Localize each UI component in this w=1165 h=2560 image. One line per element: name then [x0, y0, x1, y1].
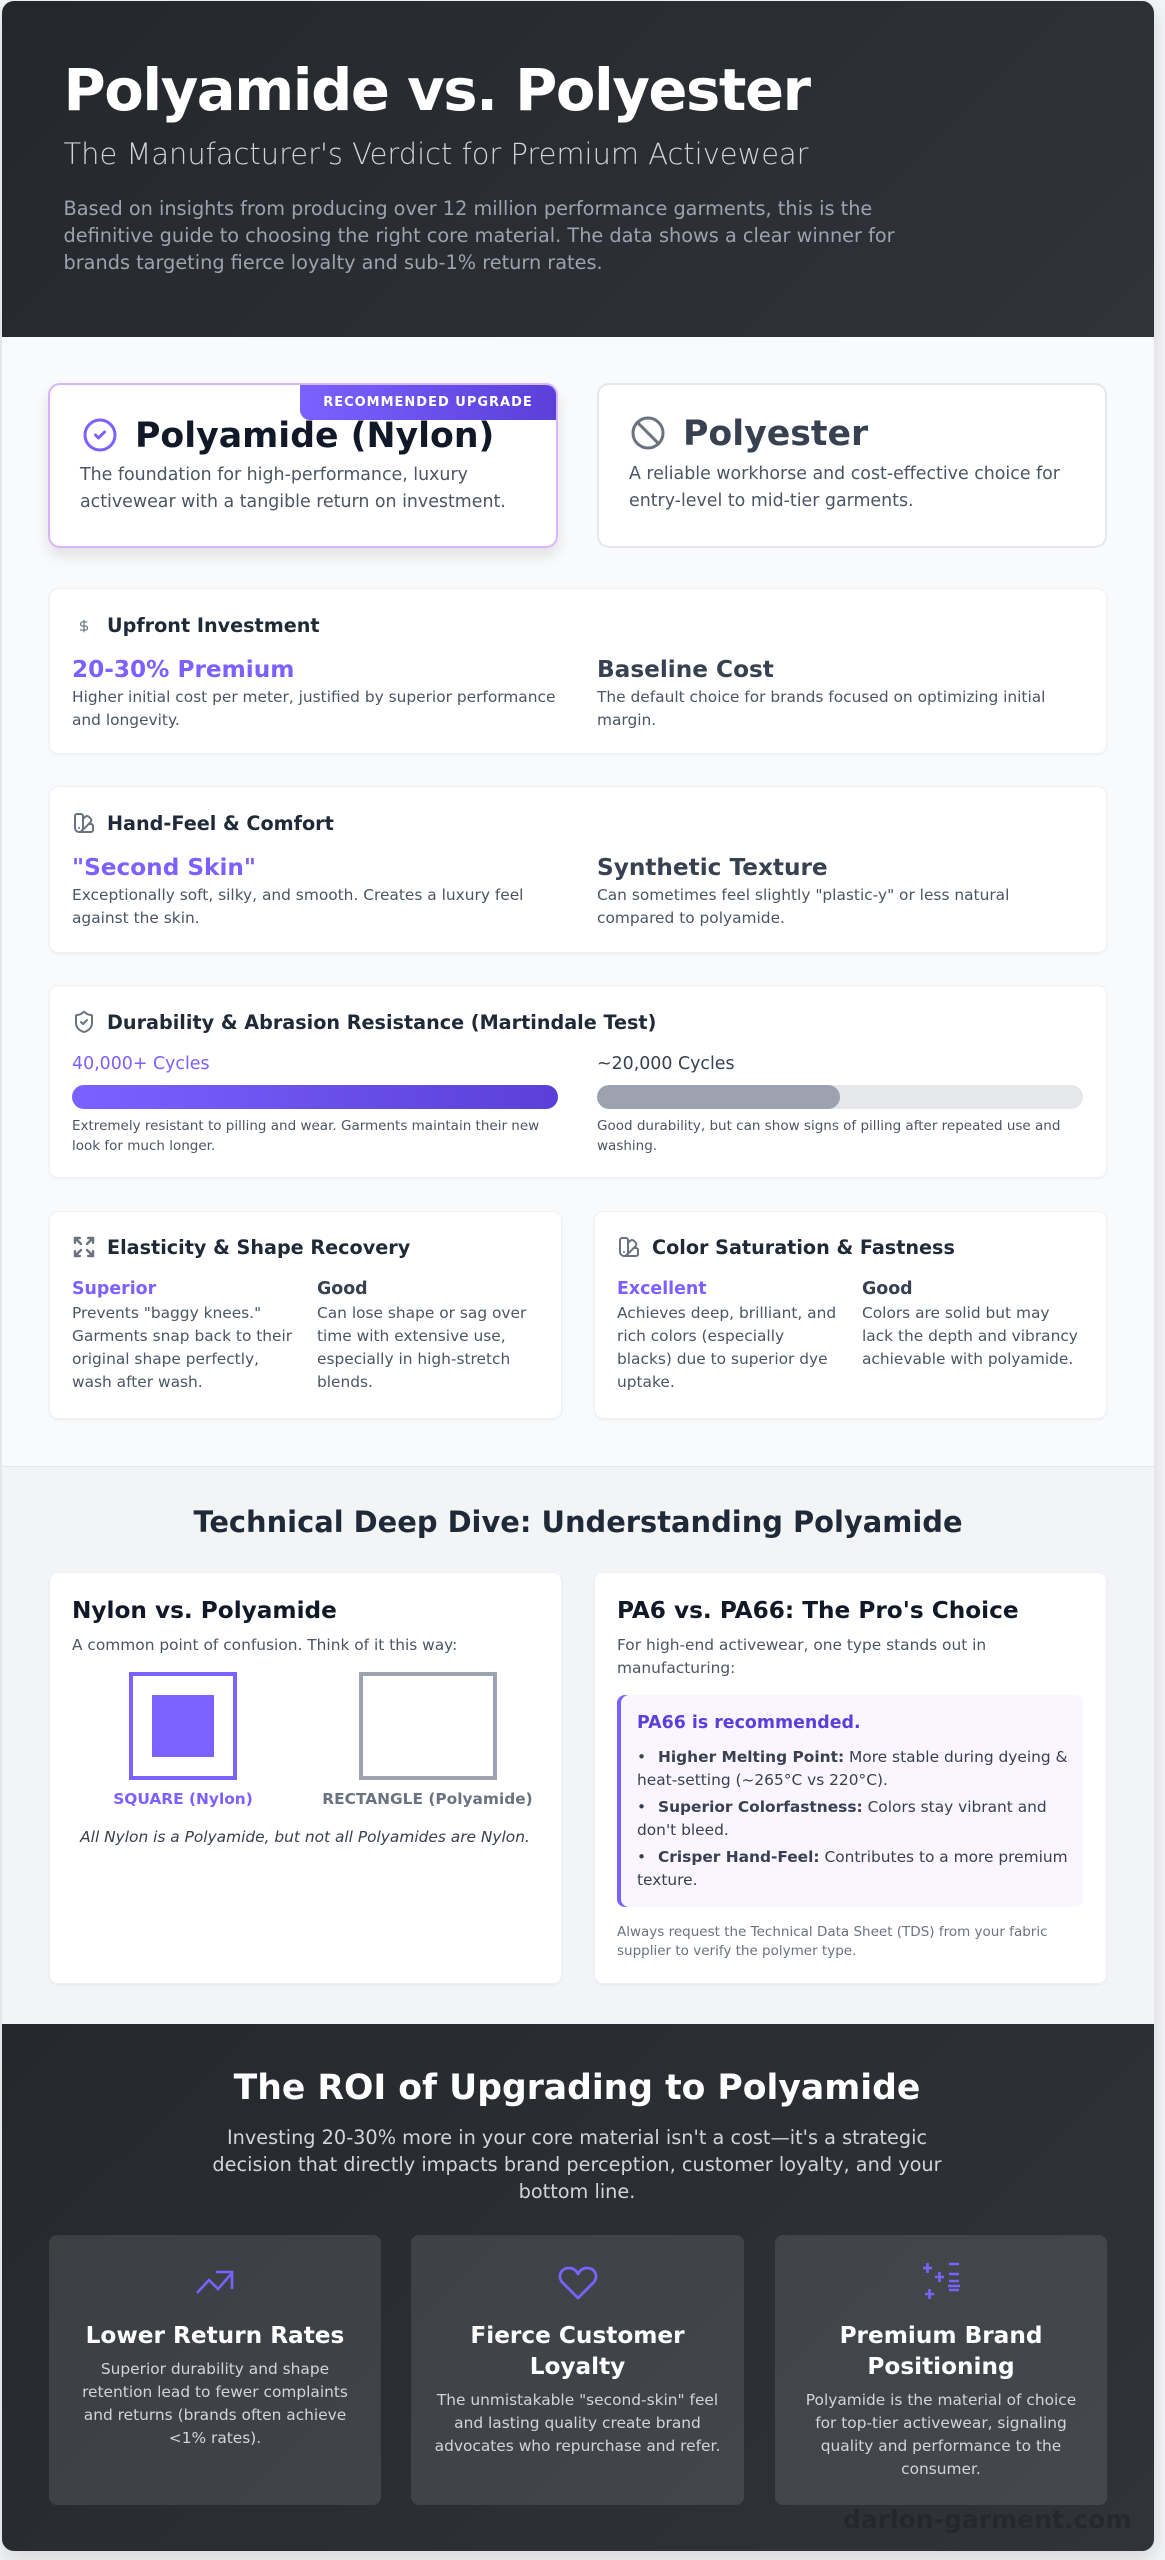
description: activewear with a tangible return on investment. — [80, 492, 506, 512]
text — [82, 2360, 348, 2447]
text: polyester: blends. — [317, 1373, 373, 1391]
icon: swatch — [74, 813, 94, 833]
callout: PA66 recommended — [617, 1695, 1083, 1907]
text: polyamide: original shape perfectly, — [72, 1350, 259, 1368]
text: The unmistakable "second-skin" feel — [437, 2391, 718, 2409]
label: rectangle: RECTANGLE (Polyamide) — [322, 1790, 533, 1808]
icon: expand arrows — [74, 1236, 94, 1258]
icon: sparkles — [923, 2262, 960, 2299]
label: polyamide: Excellent — [617, 1279, 707, 1299]
section heading: Technical Deep Dive: Understanding Polyamide — [193, 1505, 963, 1539]
text: polyester: compared to polyamide. — [597, 909, 785, 927]
value: polyamide: "Second Skin" — [72, 854, 256, 881]
watermark: darlon-garment.com — [843, 2505, 1131, 2534]
text: polyamide: wash after wash. — [72, 1373, 203, 1391]
list item: • — [637, 1848, 646, 1866]
list item: Superior Colorfastness: Colors stay vibrant and — [658, 1798, 1047, 1816]
description: The foundation for high-performance, luxury — [80, 464, 468, 484]
intro text: definitive guide to choosing the right core material. The data shows a clear winner for — [64, 224, 895, 246]
subtitle: The Manufacturer's Verdict for Premium Activewear — [64, 137, 809, 171]
icon: shield check — [75, 1010, 93, 1033]
text: <1% rates). — [169, 2429, 261, 2447]
text: polyester: achievable with polyamide. — [862, 1350, 1073, 1368]
bar: polyamide full — [72, 1085, 558, 1109]
text: Superior durability and shape — [101, 2360, 329, 2378]
heading: Premium Brand — [840, 2322, 1042, 2348]
bar: polyester half — [597, 1085, 1083, 1109]
italic note: All Nylon is a Polyamide, but not all Polyamides are Nylon. — [80, 1828, 530, 1846]
text — [806, 2391, 1076, 2478]
card: lower return rates — [49, 2235, 381, 2505]
text: polyamide: uptake. — [617, 1373, 675, 1391]
section intro: Investing 20-30% more in your core material isn't a cost—it's a strategic — [227, 2126, 927, 2148]
text: polyester: especially in high-stretch — [317, 1350, 510, 1368]
list item: Crisper Hand-Feel: Contributes to a more premium — [658, 1848, 1068, 1866]
value: polyamide cycles: 40,000+ Cycles — [72, 1054, 210, 1074]
list item: • — [637, 1748, 646, 1766]
heading: Nylon vs. Polyamide — [72, 1596, 337, 1624]
panel: elasticity — [48, 1210, 562, 1419]
footnote: supplier to verify the polymer type. — [617, 1943, 856, 1959]
text: polyester: Colors are solid but may — [862, 1304, 1050, 1322]
section intro: bottom line. — [519, 2180, 635, 2202]
text: polyamide: Higher initial cost per meter, justified by superior performance — [72, 688, 555, 706]
text: polyamide: against the skin. — [72, 909, 200, 927]
list item: • — [637, 1798, 646, 1816]
heading: Elasticity & Shape Recovery — [107, 1236, 410, 1258]
heading: polyester: Polyester — [683, 414, 868, 454]
list item: Higher Melting Point: More stable during dyeing & — [658, 1748, 1068, 1766]
intro: manufacturing: — [617, 1659, 735, 1677]
badge: recommended upgrade — [300, 385, 556, 420]
list item — [637, 1748, 1068, 1788]
title: Polyamide vs. Polyester — [64, 57, 810, 124]
text: polyamide: Exceptionally soft, silky, and smooth. Creates a luxury feel — [72, 886, 523, 904]
intro text: Based on insights from producing over 12 million performance garments, this is the — [64, 196, 872, 220]
heading: Hand-Feel & Comfort — [107, 812, 334, 834]
text: polyamide — [72, 1118, 539, 1154]
text: polyester: Can sometimes feel slightly "plastic-y" or less natural — [597, 886, 1009, 904]
description: A reliable workhorse and cost-effective choice for — [629, 464, 1060, 484]
inner square — [152, 1695, 214, 1757]
heading: Lower Return Rates — [86, 2322, 344, 2348]
badge: recommended upgrade: RECOMMENDED UPGRADE — [323, 395, 533, 410]
value: polyamide: 20-30% Premium — [72, 656, 294, 683]
bar fill — [597, 1085, 840, 1109]
list item: don't bleed. — [637, 1820, 729, 1838]
section heading: The ROI of Upgrading to Polyamide — [234, 2068, 920, 2108]
text: polyester — [317, 1304, 526, 1391]
text: polyamide — [72, 1304, 292, 1391]
panel: hand-feel and comfort — [48, 786, 1106, 953]
text: polyamide — [617, 1304, 836, 1391]
label: polyester: Good — [862, 1279, 913, 1299]
heading: Durability & Abrasion Resistance (Martindale Test) — [107, 1010, 656, 1034]
section: ROI — [2, 2024, 1154, 2551]
intro text: brands targeting fierce loyalty and sub-1% return rates. — [64, 250, 603, 274]
text: polyester: The default choice for brands focused on optimizing initial — [597, 688, 1045, 706]
text: consumer. — [901, 2460, 981, 2478]
label: polyamide: Superior — [72, 1279, 156, 1299]
panel: color saturation — [594, 1210, 1106, 1419]
heading: PA6 vs. PA66: The Pro's Choice — [617, 1596, 1019, 1624]
text: polyester: Can lose shape or sag over — [317, 1304, 526, 1322]
description — [80, 464, 506, 512]
icon: trending up — [196, 2270, 234, 2294]
text: polyester: margin. — [597, 711, 656, 729]
footnote: Always request the Technical Data Sheet (TDS) from your fabric — [617, 1924, 1048, 1940]
panel: PA6 vs PA66 — [594, 1572, 1106, 1984]
outer square — [129, 1672, 237, 1780]
text: polyester: washing. — [597, 1138, 657, 1154]
label: square: SQUARE (Nylon) — [113, 1790, 253, 1808]
heading: Positioning — [867, 2352, 1015, 2380]
text: retention lead to fewer complaints — [82, 2383, 348, 2401]
text: polyamide: look for much longer. — [72, 1138, 215, 1154]
text: and lasting quality create brand — [454, 2414, 701, 2432]
intro: A common point of confusion. Think of it this way: — [72, 1636, 457, 1654]
text: polyester — [597, 886, 1009, 927]
diagram: rectangle polyamide — [322, 1672, 533, 1808]
text: polyamide: Prevents "baggy knees." — [72, 1304, 261, 1322]
label: polyester: Good — [317, 1279, 368, 1299]
text: polyamide — [72, 886, 523, 927]
text: polyamide — [72, 688, 555, 729]
intro — [617, 1636, 986, 1677]
heading: Upfront Investment — [107, 614, 320, 636]
text: quality and performance to the — [821, 2437, 1061, 2455]
section intro — [212, 2126, 942, 2202]
text: polyamide: Extremely resistant to pilling and wear. Garments maintain their new — [72, 1118, 539, 1134]
card: premium brand positioning — [775, 2235, 1107, 2505]
value: polyester: Synthetic Texture — [597, 854, 828, 881]
description: entry-level to mid-tier garments. — [629, 490, 914, 510]
text: polyester — [862, 1304, 1078, 1368]
text: polyester: Good durability, but can show signs of pilling after repeated use and — [597, 1118, 1060, 1134]
panel: upfront investment — [48, 588, 1106, 754]
callout title: PA66 is recommended. — [637, 1713, 861, 1733]
list item — [637, 1848, 1068, 1888]
heading: Fierce Customer — [470, 2322, 685, 2348]
text: polyester: lack the depth and vibrancy — [862, 1327, 1078, 1345]
panel: polyamide verdict card — [48, 383, 558, 548]
text: polyamide: blacks) due to superior dye — [617, 1350, 828, 1368]
icon: dollar — [80, 620, 88, 632]
panel: durability — [48, 985, 1106, 1178]
text: polyester: time with extensive use, — [317, 1327, 506, 1345]
intro text — [64, 196, 895, 274]
value: polyester cycles: ~20,000 Cycles — [597, 1054, 735, 1074]
text: advocates who repurchase and refer. — [435, 2437, 720, 2455]
panel: nylon vs polyamide — [48, 1572, 562, 1984]
icon: swatch — [619, 1237, 639, 1257]
footnote — [617, 1924, 1048, 1959]
intro: For high-end activewear, one type stands out in — [617, 1636, 986, 1654]
text: polyester — [597, 1118, 1060, 1154]
text: for top-tier activewear, signaling — [815, 2414, 1067, 2432]
text: polyamide: and longevity. — [72, 711, 180, 729]
icon: heart — [558, 2266, 598, 2300]
list item: texture. — [637, 1870, 697, 1888]
icon: check circle — [84, 418, 116, 452]
text: and returns (brands often achieve — [84, 2406, 346, 2424]
list item — [637, 1798, 1047, 1838]
text — [435, 2391, 720, 2455]
text: Polyamide is the material of choice — [806, 2391, 1076, 2409]
text: polyamide: Garments snap back to their — [72, 1327, 292, 1345]
description — [629, 464, 1060, 510]
section intro: decision that directly impacts brand perception, customer loyalty, and your — [212, 2152, 942, 2176]
diagram: square nylon — [113, 1672, 253, 1808]
header panel — [2, 1, 1154, 337]
heading: polyamide: Polyamide (Nylon) — [135, 416, 494, 456]
text: polyamide: rich colors (especially — [617, 1327, 784, 1345]
card: fierce customer loyalty — [411, 2235, 744, 2505]
text: polyamide: Achieves deep, brilliant, and — [617, 1304, 836, 1322]
heading: Color Saturation & Fastness — [652, 1236, 955, 1258]
list item: heat-setting (~265°C vs 220°C). — [637, 1770, 888, 1788]
icon: ban circle — [632, 416, 664, 450]
heading — [470, 2322, 685, 2380]
section: technical deep dive — [2, 1466, 1154, 2024]
value: polyester: Baseline Cost — [597, 656, 774, 683]
heading: Loyalty — [530, 2352, 625, 2380]
heading — [840, 2322, 1042, 2380]
panel: polyester verdict card — [597, 383, 1107, 548]
text: polyester — [596, 688, 1045, 729]
outer rectangle — [359, 1672, 497, 1780]
